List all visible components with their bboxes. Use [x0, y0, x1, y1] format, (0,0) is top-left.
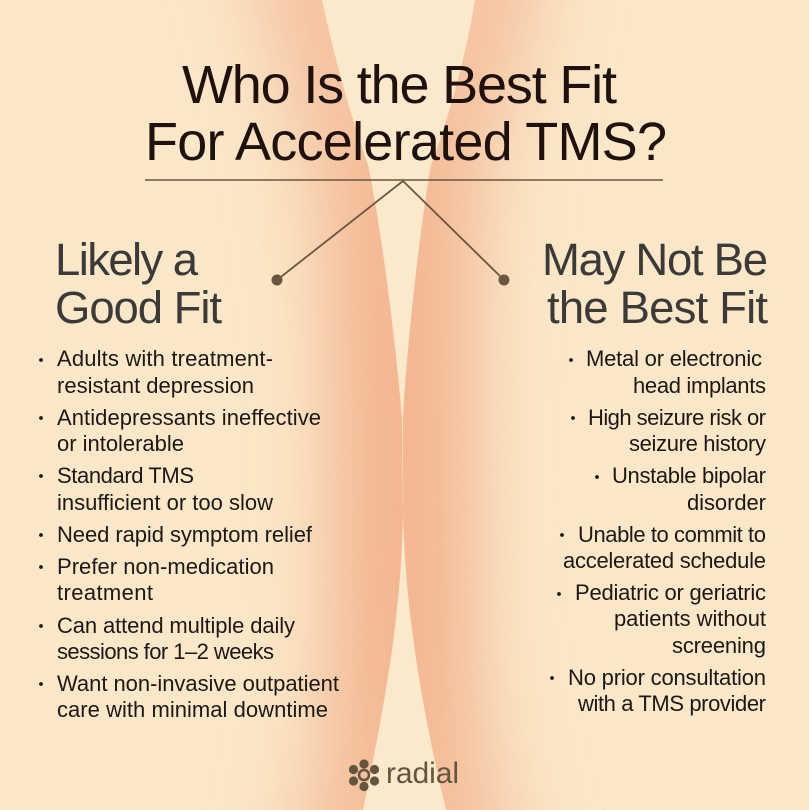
list: good fit criteria: Need rapid symptom relief [57, 522, 313, 547]
list: good fit criteria: Want non-invasive outpatient [57, 671, 339, 696]
list: not the best fit criteria: with a TMS provider [577, 691, 766, 716]
list: not the best fit criteria: High seizure risk or [588, 405, 766, 430]
list: good fit criteria: or intolerable [57, 431, 184, 456]
list: not the best fit criteria: screening [672, 633, 766, 658]
heading: likely a good fit: Good Fit [55, 282, 222, 333]
list: not the best fit criteria: Metal or electronic [586, 346, 762, 371]
list: not the best fit criteria: Pediatric or geriatric [575, 580, 766, 605]
heading: likely a good fit [55, 234, 222, 333]
list: not the best fit criteria: Unstable bipolar [612, 463, 766, 488]
list: not the best fit criteria: disorder [687, 490, 766, 515]
logo: radial: radial [386, 757, 459, 790]
heading: may not be the best fit: May Not Be [542, 234, 768, 285]
list: not the best fit criteria: Unable to commit to [578, 522, 766, 547]
icon: radial flower [349, 759, 379, 791]
title: Who Is the Best Fit [182, 55, 617, 115]
list: good fit criteria: Prefer non-medication [57, 554, 274, 579]
heading: may not be the best fit: the Best Fit [547, 282, 768, 333]
list: good fit criteria: Adults with treatment- [57, 346, 273, 371]
list: good fit criteria: Antidepressants ineffective [57, 405, 321, 430]
list: not the best fit criteria: head implants [633, 373, 766, 398]
list: good fit criteria: care with minimal downtime [57, 697, 328, 722]
list: not the best fit criteria: No prior consultation [568, 665, 766, 690]
list: not the best fit criteria: patients without [614, 606, 766, 631]
connector: title rule with branches [145, 180, 663, 286]
list: good fit criteria: treatment [57, 580, 153, 605]
list: good fit criteria: sessions for 1–2 weeks [57, 639, 274, 664]
heading: may not be the best fit [542, 234, 768, 333]
central hourglass shape [322, 0, 475, 810]
list: good fit criteria: Can attend multiple daily [57, 613, 295, 638]
list: good fit criteria: Standard TMS [57, 463, 194, 488]
list: good fit criteria: insufficient or too slow [57, 490, 273, 515]
list: good fit criteria: resistant depression [57, 373, 254, 398]
list: good fit criteria [39, 346, 339, 722]
title [145, 55, 667, 172]
list: not the best fit criteria [550, 346, 766, 716]
title: For Accelerated TMS? [145, 112, 667, 172]
heading: likely a good fit: Likely a [55, 234, 199, 285]
list: not the best fit criteria: accelerated schedule [563, 548, 766, 573]
list: not the best fit criteria: seizure history [629, 431, 766, 456]
logo: radial [349, 757, 459, 791]
